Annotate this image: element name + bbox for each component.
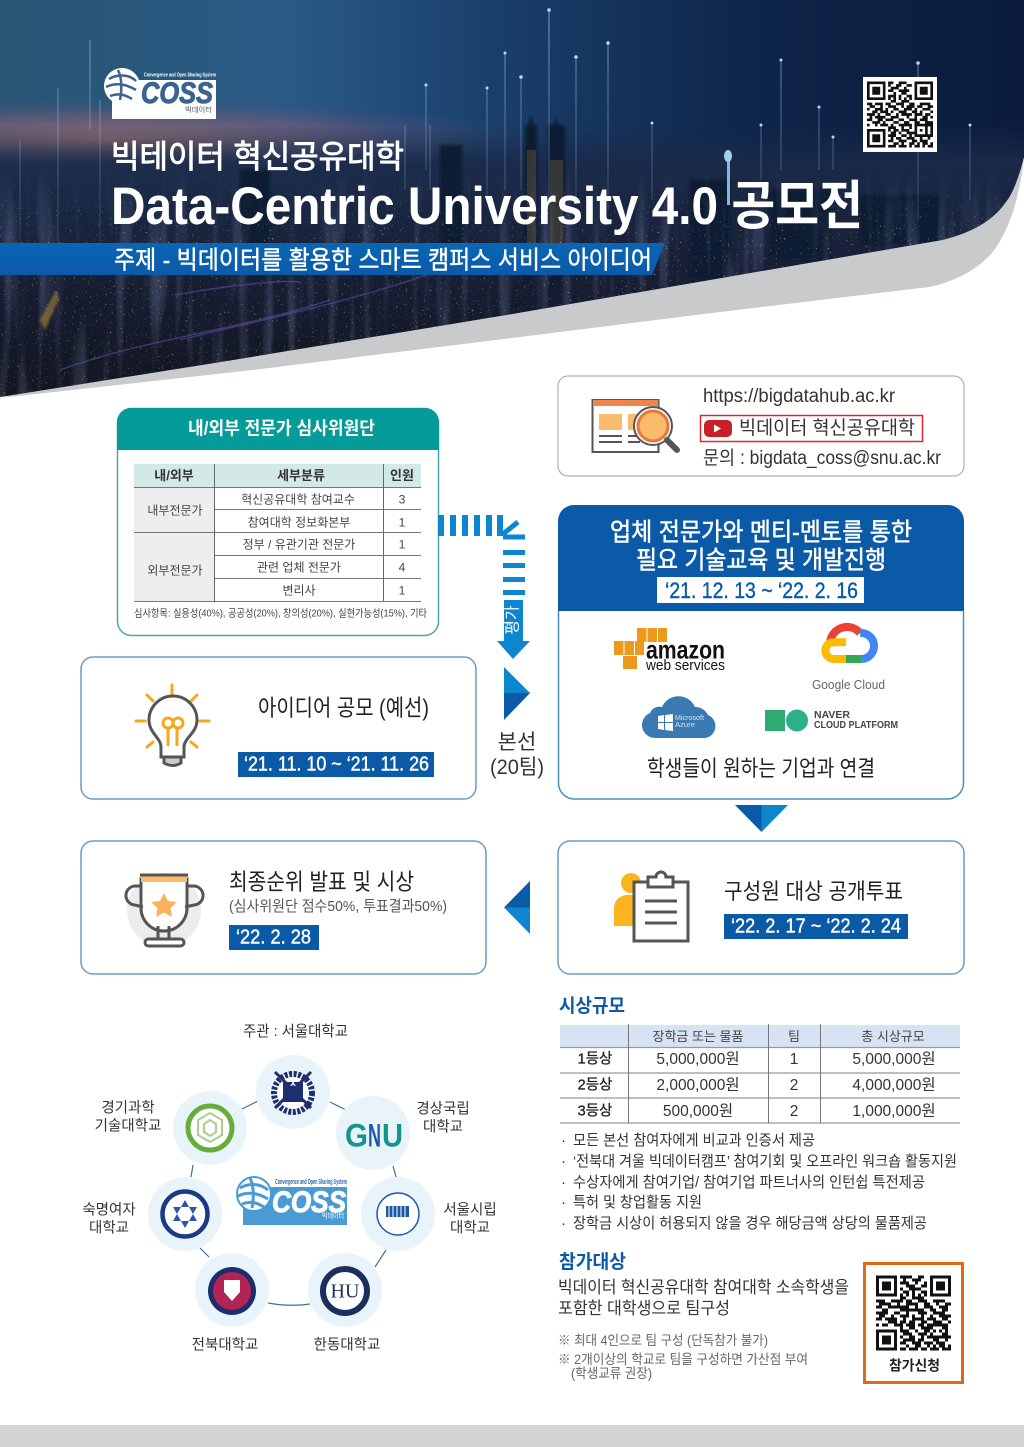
YouTube channel: 빅데이터 혁신공유대학 <box>739 417 915 439</box>
header background: night city <box>0 0 1024 400</box>
text: team notes: ※ 최대 4인으로 팀 구성 (단독참가 불가) <box>558 1333 768 1348</box>
arrow: to final results <box>504 881 530 934</box>
logo: COSS center: 빅데이터 <box>322 1211 344 1220</box>
connector lines <box>191 1101 396 1305</box>
heading: mentoring: 필요 기술교육 및 개발진행 <box>636 546 886 574</box>
logo: Gyeongsang National University: U <box>382 1118 403 1154</box>
heading: judging committee: 내/외부 전문가 심사위원단 <box>188 418 375 438</box>
labels: university names: 대학교 <box>423 1118 463 1136</box>
table: prizes: 2등상 <box>578 1076 612 1094</box>
logo: Microsoft Azure <box>642 696 715 738</box>
logo: Google Cloud: Google Cloud <box>812 677 885 692</box>
logo: Gyeongsang National University: G <box>345 1118 368 1154</box>
panel: mentoring <box>558 505 964 799</box>
heading: eligibility: 참가대상 <box>559 1251 626 1273</box>
text: public vote title: 구성원 대상 공개투표 <box>724 879 903 904</box>
text: team notes: (학생교류 권장) <box>571 1366 652 1381</box>
labels: university names <box>82 1100 497 1354</box>
QR code: apply <box>864 1264 962 1382</box>
table: prizes: 1,000,000원 <box>852 1102 936 1120</box>
text: host university: 주관 : 서울대학교 <box>243 1023 348 1040</box>
table: prizes: 2,000,000원 <box>656 1076 740 1094</box>
text: finals 20 teams: 본선 <box>498 731 536 754</box>
logo: amazon web services: amazon <box>646 634 725 664</box>
labels: university names: 전북대학교 <box>192 1336 258 1354</box>
table: committee composition: 4 <box>399 560 406 574</box>
text: idea contest title: 아이디어 공모 (예선) <box>258 694 429 720</box>
list: benefits: 특허 및 창업활동 지원 <box>573 1194 702 1211</box>
heading: program name: 빅테이터 혁신공유대학 <box>111 138 404 174</box>
YouTube channel <box>700 416 922 442</box>
QR code: header <box>863 77 937 152</box>
table: committee composition: 1 <box>399 584 406 598</box>
table: prizes: 총 시상규모 <box>861 1029 925 1044</box>
table: prizes <box>560 1024 960 1123</box>
logo: COSS center: Convergence and Open Sharing System <box>275 1179 347 1186</box>
date: mentoring: ‘21. 12. 13 ~ ‘22. 2. 16 <box>665 578 858 603</box>
heading: prize scale: 시상규모 <box>559 995 625 1017</box>
date: final results: ‘22. 2. 28 <box>236 926 311 948</box>
text: scoring ratio: (심사위원단 점수50%, 투표결과50%) <box>229 898 447 915</box>
table: committee composition: 혁신공유대학 참여교수 <box>241 492 355 506</box>
text: website URL: https://bigdatahub.ac.kr <box>703 386 896 407</box>
labels: university names: 대학교 <box>450 1220 490 1236</box>
icon: voter with clipboard <box>614 872 688 941</box>
text: team notes <box>558 1333 808 1381</box>
date: idea contest: ‘21. 11. 10 ~ ‘21. 11. 26 <box>244 754 429 776</box>
logo: amazon web services: web services <box>645 657 725 674</box>
logo: Microsoft Azure: Azure <box>675 722 695 729</box>
table: committee composition: 정부 / 유관기관 전문가 <box>243 538 355 552</box>
date: public vote: ‘22. 2. 17 ~ ‘22. 2. 24 <box>731 916 901 938</box>
arrow: evaluation: 평가 <box>504 605 522 635</box>
table: committee composition: 변리사 <box>282 584 316 598</box>
list: benefits: · <box>561 1132 566 1149</box>
logo: Google Cloud <box>812 627 885 692</box>
text: finals 20 teams <box>490 731 544 779</box>
title: Data-Centric University 4.0 공모전 <box>111 177 863 236</box>
logo: COSS <box>104 68 216 119</box>
text: eligibility description: 빅데이터 혁신공유대학 참여대학 소속학생을 <box>558 1278 849 1297</box>
panel: final results <box>81 841 486 974</box>
logo: COSS: COSS <box>141 77 213 110</box>
table: committee composition: 1 <box>399 538 406 552</box>
table: committee composition: 1 <box>399 516 406 530</box>
logo: Naver Cloud Platform <box>765 710 898 732</box>
subject band: 주제 - 빅데이터를 활용한 스마트 캠퍼스 서비스 아이디어 <box>114 246 652 274</box>
heading: mentoring <box>610 518 912 574</box>
labels: university names: 기술대학교 <box>95 1118 161 1134</box>
icon: light bulb <box>136 685 209 766</box>
logo: Handong Global University <box>308 1253 382 1327</box>
table: prizes: 1 <box>790 1051 798 1068</box>
table: committee composition: 내/외부 <box>154 468 194 483</box>
icon: web page with magnifier <box>592 400 677 452</box>
labels: university names: 한동대학교 <box>314 1336 380 1354</box>
text: judging criteria: 심사항목: 실용성(40%), 공공성(20%), 창의성(20%), 실현가능성(15%), 기타 <box>134 608 427 620</box>
logo: University of Seoul <box>361 1177 435 1251</box>
section: eligibility <box>558 1251 849 1381</box>
table: committee composition: 3 <box>399 492 406 506</box>
table: prizes: 3등상 <box>578 1102 612 1120</box>
logo: Seoul National University of Science and Technology <box>173 1091 247 1165</box>
text: company connection: 학생들이 원하는 기업과 연결 <box>647 756 875 781</box>
table: prizes: 5,000,000원 <box>656 1050 740 1068</box>
logo: Gyeongsang National University: N <box>368 1118 381 1154</box>
table: committee composition: 관련 업체 전문가 <box>257 560 341 574</box>
list: benefits: · <box>561 1153 566 1170</box>
panel: idea contest <box>81 657 476 799</box>
logo: Microsoft Azure: Microsoft <box>675 715 704 722</box>
subject band <box>0 243 665 275</box>
logo: amazon web services <box>614 628 725 674</box>
heading: mentoring: 업체 전문가와 멘티-멘토를 통한 <box>610 518 912 546</box>
table: committee composition: 외부전문가 <box>147 564 203 578</box>
labels: university names: 서울시립 <box>443 1202 497 1218</box>
university network <box>82 1055 497 1354</box>
table: committee composition: 세부분류 <box>277 468 325 483</box>
table: committee composition: 인원 <box>390 468 414 483</box>
logo: COSS: Convergence and Open Sharing System <box>144 72 216 78</box>
logo: COSS center <box>237 1177 347 1225</box>
table: prizes: 2 <box>790 1103 798 1120</box>
text: finals 20 teams: (20팀) <box>490 756 544 779</box>
logo: Jeonbuk National University <box>195 1253 269 1327</box>
logo: Naver Cloud Platform: CLOUD PLATFORM <box>814 720 898 731</box>
logo: Gyeongsang National University <box>336 1096 410 1170</box>
table: committee composition <box>134 464 421 602</box>
text: final results title: 최종순위 발표 및 시상 <box>229 868 414 894</box>
footer band <box>0 1425 1024 1447</box>
table: committee composition: 내부전문가 <box>147 504 203 518</box>
table: prizes: 2 <box>790 1077 798 1094</box>
labels: university names: 경상국립 <box>416 1100 470 1118</box>
arrow: down to vote <box>735 805 788 832</box>
panel: judging committee <box>117 408 439 636</box>
arrow: evaluation <box>438 515 530 659</box>
list: benefits: 장학금 시상이 허용되지 않을 경우 해당금액 상당의 물품제공 <box>573 1215 927 1232</box>
logo: COSS: 빅데이터 <box>185 105 212 114</box>
table: prizes: 5,000,000원 <box>852 1050 936 1068</box>
logo: Seoul National University: ㅈ <box>288 1078 298 1090</box>
labels: university names: 숙명여자 <box>82 1202 136 1218</box>
logo: Naver Cloud Platform: NAVER <box>814 710 851 721</box>
list: benefits: 모든 본선 참여자에게 비교과 인증서 제공 <box>573 1132 815 1149</box>
text: eligibility description <box>558 1278 849 1318</box>
list: benefits: · <box>561 1215 566 1232</box>
panel: links and contact <box>558 376 964 476</box>
list: benefits <box>561 1132 957 1232</box>
table: prizes: 팀 <box>788 1029 800 1044</box>
panel: public vote <box>558 841 964 974</box>
labels: university names: 대학교 <box>89 1220 129 1236</box>
list: benefits: ‘전북대 겨울 빅데이터캠프’ 참여기회 및 오프라인 워크숍 활동지원 <box>573 1153 957 1170</box>
logo: Seoul National University <box>256 1055 330 1129</box>
table: prizes: 500,000원 <box>663 1102 733 1120</box>
list: benefits: · <box>561 1174 566 1191</box>
logo: Sookmyung Women's University <box>148 1177 222 1251</box>
table: committee composition: 참여대학 정보화본부 <box>248 516 350 530</box>
table: prizes: 1등상 <box>578 1050 612 1068</box>
labels: university names: 경기과학 <box>101 1100 155 1116</box>
table: prizes: 장학금 또는 물품 <box>653 1029 744 1044</box>
text: team notes: ※ 2개이상의 학교로 팀을 구성하면 가산점 부여 <box>558 1352 808 1367</box>
QR code: apply: 참가신청 <box>889 1358 940 1374</box>
icon: trophy <box>126 873 203 947</box>
list: benefits: 수상자에게 참여기업/ 참여기업 파트너사의 인턴쉽 특전제공 <box>573 1174 925 1191</box>
text: email contact: 문의 : bigdata_coss@snu.ac.kr <box>703 447 942 469</box>
table: prizes: 4,000,000원 <box>852 1076 936 1094</box>
logo: COSS center: COSS <box>272 1186 346 1219</box>
logo: Handong Global University: HU <box>331 1280 360 1302</box>
arrow: to finals <box>504 667 530 720</box>
list: benefits: · <box>561 1194 566 1211</box>
text: eligibility description: 포함한 대학생으로 팀구성 <box>558 1299 730 1318</box>
